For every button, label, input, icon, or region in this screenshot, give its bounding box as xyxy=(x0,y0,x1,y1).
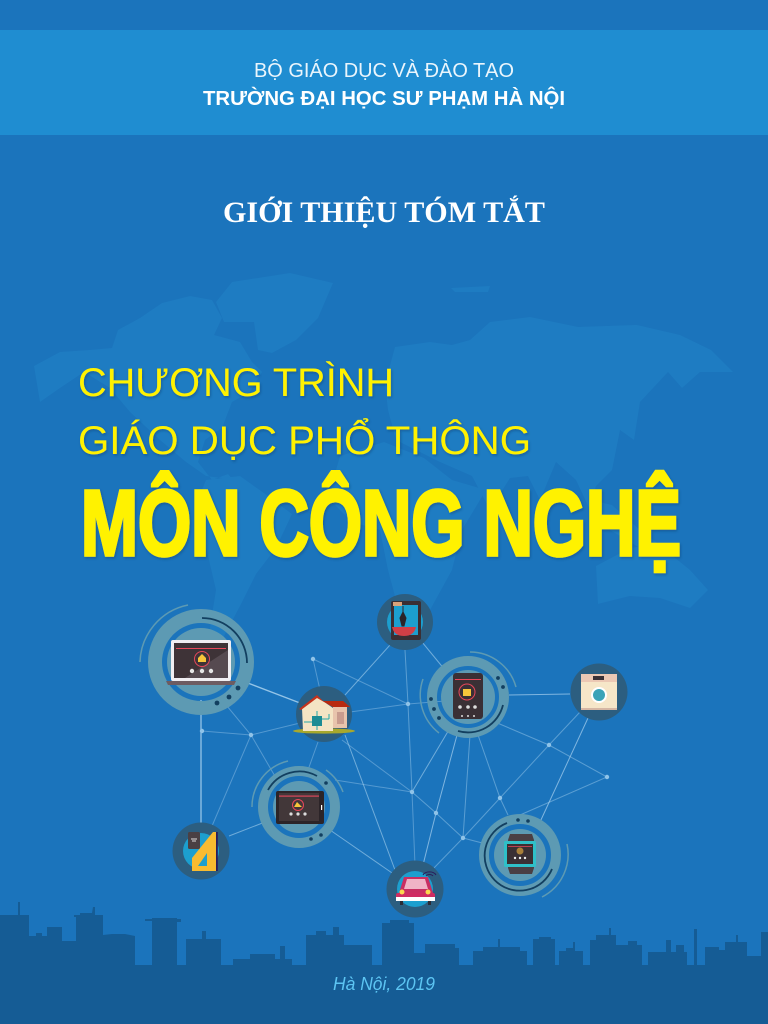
network nodes xyxy=(200,657,609,840)
place and date: Hà Nội, 2019 xyxy=(333,974,435,994)
icon: smart house xyxy=(293,686,355,742)
subtitle: GIỚI THIỆU TÓM TẮT xyxy=(223,195,545,229)
title block: CHƯƠNG TRÌNH xyxy=(78,360,394,405)
icon: smart car xyxy=(386,860,444,918)
icon: laptop xyxy=(140,605,247,708)
icon: washing machine xyxy=(570,664,628,720)
world map xyxy=(34,273,733,640)
icon: ruler and phone xyxy=(172,822,230,880)
icon: smartwatch xyxy=(484,818,568,897)
icon: smartphone xyxy=(420,652,516,733)
header: university: TRƯỜNG ĐẠI HỌC SƯ PHẠM HÀ NỘI xyxy=(203,86,565,110)
title block: GIÁO DỤC PHỔ THÔNG xyxy=(78,416,531,463)
header: ministry: BỘ GIÁO DỤC VÀ ĐÀO TẠO xyxy=(254,59,514,82)
network lines xyxy=(201,642,607,875)
title block xyxy=(78,360,681,575)
top band xyxy=(0,30,768,135)
icon: printer xyxy=(377,594,433,650)
icon: tablet xyxy=(252,761,343,843)
skyline and bottom band xyxy=(0,902,768,1024)
